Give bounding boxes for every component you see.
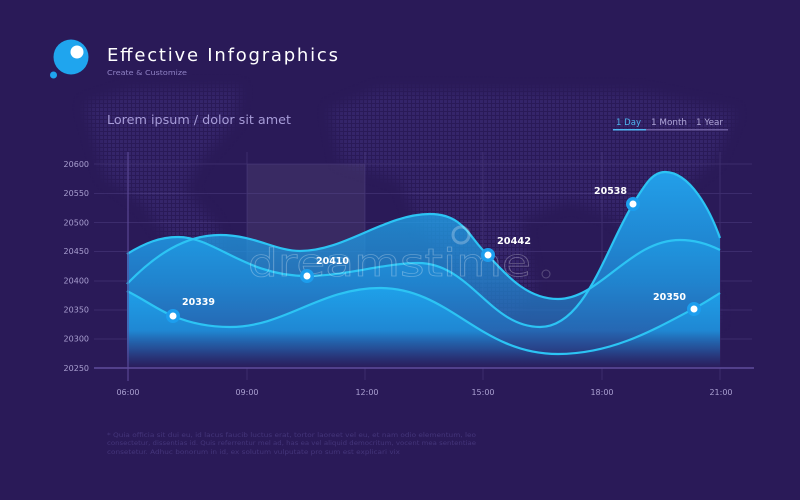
data point: 20350 [653,292,701,316]
y axis labels: 20300 [64,334,89,344]
data point: 20339 [166,297,215,323]
y axis labels: 20550 [64,189,89,198]
footnote: consetetur. Adhuc bonorum in id, ex solutum vulputate pro sum est explicari vix [107,448,400,456]
data point: 20350: 20350 [653,292,686,303]
x axis labels: 21:00 [709,388,733,397]
logo icon [50,40,88,78]
x axis labels: 06:00 [116,388,140,397]
line: series B [127,214,720,299]
x axis labels: 15:00 [471,388,495,397]
data point: 20538: 20538 [594,186,627,197]
world dot map [88,88,731,291]
data point: 20410 [300,256,349,283]
x axis labels: 18:00 [590,388,614,397]
grid lines [94,152,752,380]
range tabs: 1 Year [696,118,723,128]
y axis labels: 20600 [64,160,89,169]
x axis labels: 09:00 [235,388,259,397]
footnote [107,431,476,456]
line: series A [127,172,720,327]
data point: 20442 [481,236,531,262]
y axis labels [64,160,89,373]
footnote: consectetur, dissentias id. Quis referrentur mel ad, has ea vel aliquid democritum, vocent mea sententiae [107,439,476,447]
range tabs [613,118,728,130]
range tabs: 1 Day [616,118,642,128]
watermark: dreamstime [248,241,531,285]
chart: area curves [126,172,721,368]
y axis labels: 20250 [64,364,89,373]
x axis labels: 12:00 [355,388,379,397]
range tabs: 1 Month [651,118,687,128]
y axis labels: 20500 [64,218,89,228]
data point: 20410: 20410 [316,256,349,267]
area: series B [127,214,720,368]
footnote: * Quia officia sit dui eu, id lacus faucib luctus erat, tortor laoreet vel eu, et nam odio elementum, leo [107,431,476,439]
y axis labels: 20350 [64,306,89,314]
area: series C [127,288,720,368]
title: Effective Infographics [107,45,338,66]
baseline and y axis [94,152,754,381]
data point: 20442: 20442 [497,236,531,247]
bottom fade [126,330,721,368]
data point: 20339: 20339 [182,297,215,308]
y axis labels: 20400 [64,276,89,286]
chart heading: Lorem ipsum / dolor sit amet [107,112,291,127]
subtitle: Create & Customize [107,69,187,77]
data point: 20538 [594,186,640,211]
highlighted time band [247,164,365,368]
area: series A [127,172,720,368]
watermark [248,227,550,285]
y axis labels: 20450 [64,247,89,256]
x axis labels [116,388,733,397]
line: series C [127,288,720,354]
